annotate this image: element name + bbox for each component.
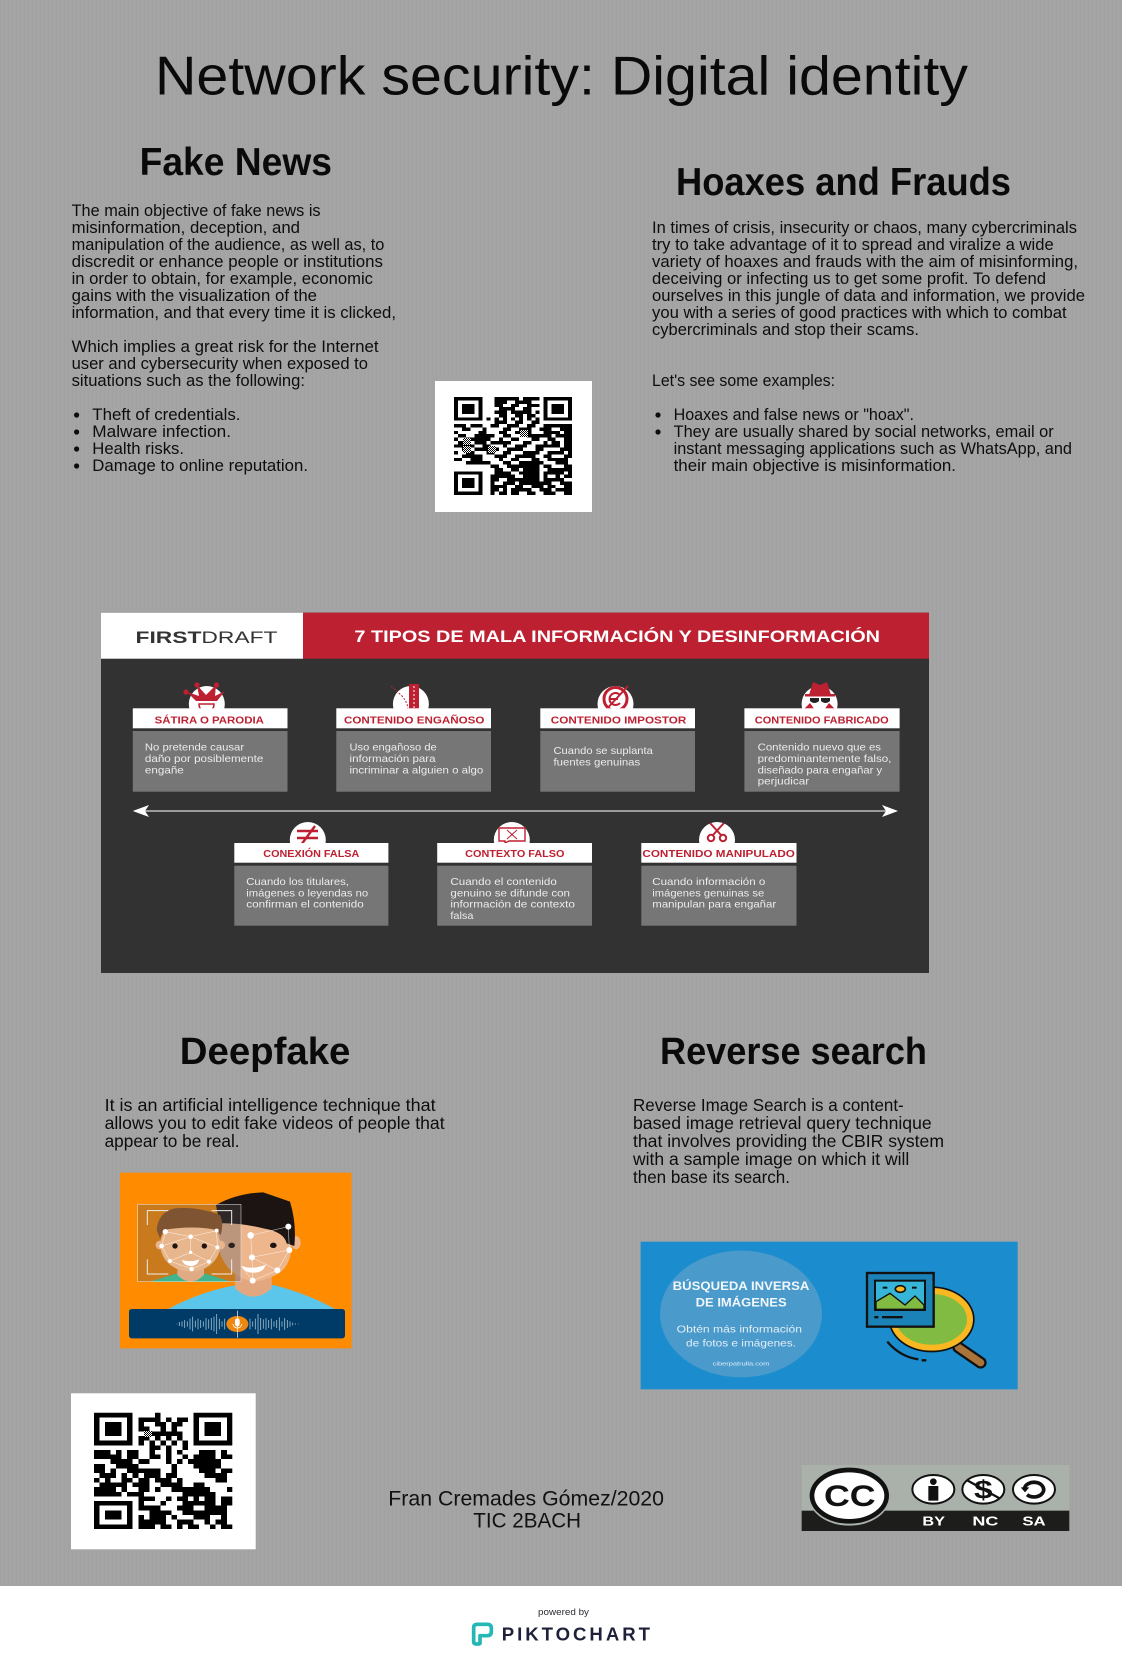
text block: Fake News intro: gains with the visualization of the — [72, 287, 317, 305]
illustration: reverse image search banner: Obtén más información — [677, 1325, 802, 1336]
text block: Hoaxes and Frauds intro: In times of crisis, insecurity or chaos, many cybercriminals — [652, 219, 1077, 237]
arrow: spectrum — [133, 805, 898, 817]
card: false context: CONTEXTO FALSO — [465, 849, 565, 860]
creative commons badge — [802, 1465, 1069, 1531]
text block: Reverse search: then base its search. — [633, 1167, 790, 1187]
card: false connection — [234, 822, 388, 926]
bullet list: Fake News: Theft of credentials. — [92, 406, 240, 424]
footer: powered by Piktochart: PIKTOCHART — [502, 1624, 651, 1645]
footer: powered by Piktochart: powered by — [538, 1607, 589, 1618]
card: fabricated: diseñado para engañar y — [758, 764, 883, 776]
creative commons badge: CC — [824, 1480, 876, 1513]
text block: Fake News intro: discredit or enhance people or institutions — [72, 253, 383, 271]
text block: Hoaxes and Frauds intro: cybercriminals and stop their scams. — [652, 321, 919, 339]
card: false context — [437, 822, 592, 926]
text block: Deepfake — [105, 1095, 445, 1151]
card: misleading: Uso engañoso de — [350, 742, 437, 754]
card: manipulated: Cuando información o — [652, 876, 765, 888]
card: fabricated: Contenido nuevo que es — [758, 742, 881, 754]
text block: Fake News intro: The main objective of fake news is — [72, 202, 321, 220]
icon: magnifier with picture — [867, 1273, 981, 1363]
heading: Deepfake: Deepfake — [180, 1031, 350, 1073]
text block: Fake News intro: in order to obtain, for example, economic — [72, 270, 373, 288]
icon: crossed copyright — [603, 686, 628, 713]
panel header: title bar: 7 TIPOS DE MALA INFORMACIÓN Y DESINFORMACIÓN — [354, 627, 880, 646]
card: manipulated: imágenes genuinas se — [652, 887, 764, 899]
title: Network security: Digital identity — [155, 44, 969, 106]
icon: speech bubble with x — [499, 828, 525, 843]
creative commons badge: $ — [974, 1475, 993, 1505]
illustration: reverse image search banner: de fotos e imágenes. — [686, 1339, 796, 1350]
panel header: Firstdraft logo: FIRST DRAFT — [136, 628, 278, 647]
text block: Fake News intro: misinformation, deception, and — [72, 219, 300, 237]
panel header: Firstdraft logo — [101, 613, 303, 659]
text block: Fake News risks — [72, 338, 379, 390]
panel: 7 types of misinformation — [101, 613, 929, 973]
text block: Hoaxes and Frauds intro: ourselves in this jungle of data and information, we provide — [652, 287, 1085, 305]
bullet list: Fake News: Damage to online reputation. — [92, 457, 308, 475]
bullet list: hoaxes: their main objective is misinformation. — [674, 457, 956, 475]
card: fabricated: predominantemente falso, — [758, 753, 891, 765]
icon: spy — [803, 682, 836, 710]
heading: Hoaxes and Frauds: Hoaxes and Frauds — [676, 161, 1011, 204]
card: false connection: Cuando los titulares, — [246, 876, 349, 888]
card: false connection: imágenes o leyendas no — [246, 887, 368, 899]
card: fabricated: CONTENIDO FABRICADO — [755, 715, 889, 726]
text block: Fake News risks: situations such as the following: — [72, 372, 305, 390]
card: impostor: fuentes genuinas — [554, 756, 640, 768]
icon: ruler — [391, 684, 419, 710]
creative commons badge: BY — [922, 1515, 946, 1529]
card: misleading: CONTENIDO ENGAÑOSO — [344, 713, 485, 726]
bullet list: Fake News: Malware infection. — [92, 423, 231, 441]
author credit — [388, 1487, 664, 1533]
text block: Deepfake: It is an artificial intelligence technique that — [105, 1095, 436, 1115]
card: false context: Cuando el contenido — [450, 876, 557, 888]
card: fabricated — [744, 682, 900, 792]
text block: Hoaxes and Frauds intro — [652, 219, 1085, 339]
card: misleading: incriminar a alguien o algo — [350, 764, 483, 776]
card: impostor — [540, 686, 695, 792]
text block: Hoaxes and Frauds intro: variety of hoaxes and frauds with the aim of misinforming, — [652, 253, 1078, 271]
card: false context: genuino se difunde con — [450, 887, 570, 899]
icon: Piktochart logo — [474, 1624, 491, 1644]
card: manipulated: CONTENIDO MANIPULADO — [642, 849, 795, 860]
card: misleading: información para — [350, 753, 436, 765]
bullet list: Fake News: Health risks. — [92, 440, 184, 458]
card: false connection: confirman el contenido — [246, 899, 364, 911]
text block: Fake News risks: user and cybersecurity when exposed to — [72, 355, 368, 373]
QR code: center — [435, 381, 592, 512]
illustration: reverse image search banner: ciberpatrulla.com — [713, 1361, 770, 1367]
card: manipulated — [641, 822, 796, 926]
text block: Hoaxes and Frauds intro: try to take advantage of it to spread and viralize a wide — [652, 236, 1054, 254]
bullet list: hoaxes: Hoaxes and false news or "hoax". — [674, 406, 914, 424]
author credit: Fran Cremades Gómez/2020 — [388, 1487, 664, 1511]
illustration: reverse image search banner: BÚSQUEDA INVERSA — [673, 1278, 810, 1293]
card: fabricated: perjudicar — [758, 776, 810, 788]
heading: Reverse search: Reverse search — [660, 1031, 927, 1073]
text block: Fake News intro — [72, 202, 396, 322]
icon: not equal — [297, 826, 318, 845]
creative commons badge: NC — [972, 1515, 998, 1529]
text block: Fake News intro: manipulation of the audience, as well as, to — [72, 236, 384, 254]
card: satire: engañe — [145, 764, 184, 776]
bullet list: hoaxes — [655, 406, 1072, 475]
text: examples lead-in: Let's see some examples: — [652, 372, 835, 390]
card: manipulated: manipulan para engañar — [652, 899, 777, 911]
text block: Reverse search: with a sample image on which it will — [632, 1149, 909, 1169]
card: impostor: Cuando se suplanta — [554, 745, 653, 757]
text block: Hoaxes and Frauds intro: deceiving or infecting us to get some profit. To defend — [652, 270, 1046, 288]
text block: Reverse search: Reverse Image Search is a content- — [633, 1095, 904, 1115]
bullet list: hoaxes: They are usually shared by social networks, email or — [674, 423, 1054, 441]
card: satire: No pretende causar — [145, 742, 245, 754]
card: satire: daño por posiblemente — [145, 753, 263, 765]
card: satire — [133, 682, 288, 792]
card: false connection: CONEXIÓN FALSA — [263, 847, 359, 860]
heading: Fake News: Fake News — [140, 141, 332, 184]
card: false context: información de contexto — [450, 899, 575, 911]
card: impostor: CONTENIDO IMPOSTOR — [551, 715, 687, 726]
footer: powered by Piktochart — [0, 1586, 1122, 1667]
QR code: bottom left — [71, 1393, 256, 1549]
text block: Deepfake: appear to be real. — [105, 1131, 240, 1151]
bullet list: hoaxes: instant messaging applications such as WhatsApp, and — [674, 440, 1072, 458]
text block: Fake News intro: information, and that every time it is clicked, — [72, 304, 396, 322]
text block: Reverse search — [632, 1095, 944, 1187]
card: misleading — [336, 684, 491, 792]
text block: Hoaxes and Frauds intro: you with a series of good practices with which to combat — [652, 304, 1067, 322]
icon: jester — [183, 682, 225, 711]
text block: Reverse search: that involves providing the CBIR system — [633, 1131, 944, 1151]
bullet list: Fake News — [74, 406, 308, 475]
illustration: reverse image search banner: DE IMÁGENES — [696, 1295, 787, 1310]
text block: Reverse search: based image retrieval query technique — [633, 1113, 932, 1133]
text block: Deepfake: allows you to edit fake videos of people that — [105, 1113, 445, 1133]
icon: scissors — [708, 823, 726, 841]
card: false context: falsa — [450, 910, 474, 922]
illustration: reverse image search banner — [641, 1242, 1018, 1389]
text block: Fake News risks: Which implies a great risk for the Internet — [72, 338, 379, 356]
panel header: title bar — [303, 613, 929, 659]
illustration: deepfake face mapping — [120, 1173, 352, 1348]
author credit: TIC 2BACH — [473, 1509, 581, 1533]
card: satire: SÁTIRA O PARODIA — [155, 713, 264, 726]
creative commons badge: SA — [1022, 1515, 1046, 1529]
